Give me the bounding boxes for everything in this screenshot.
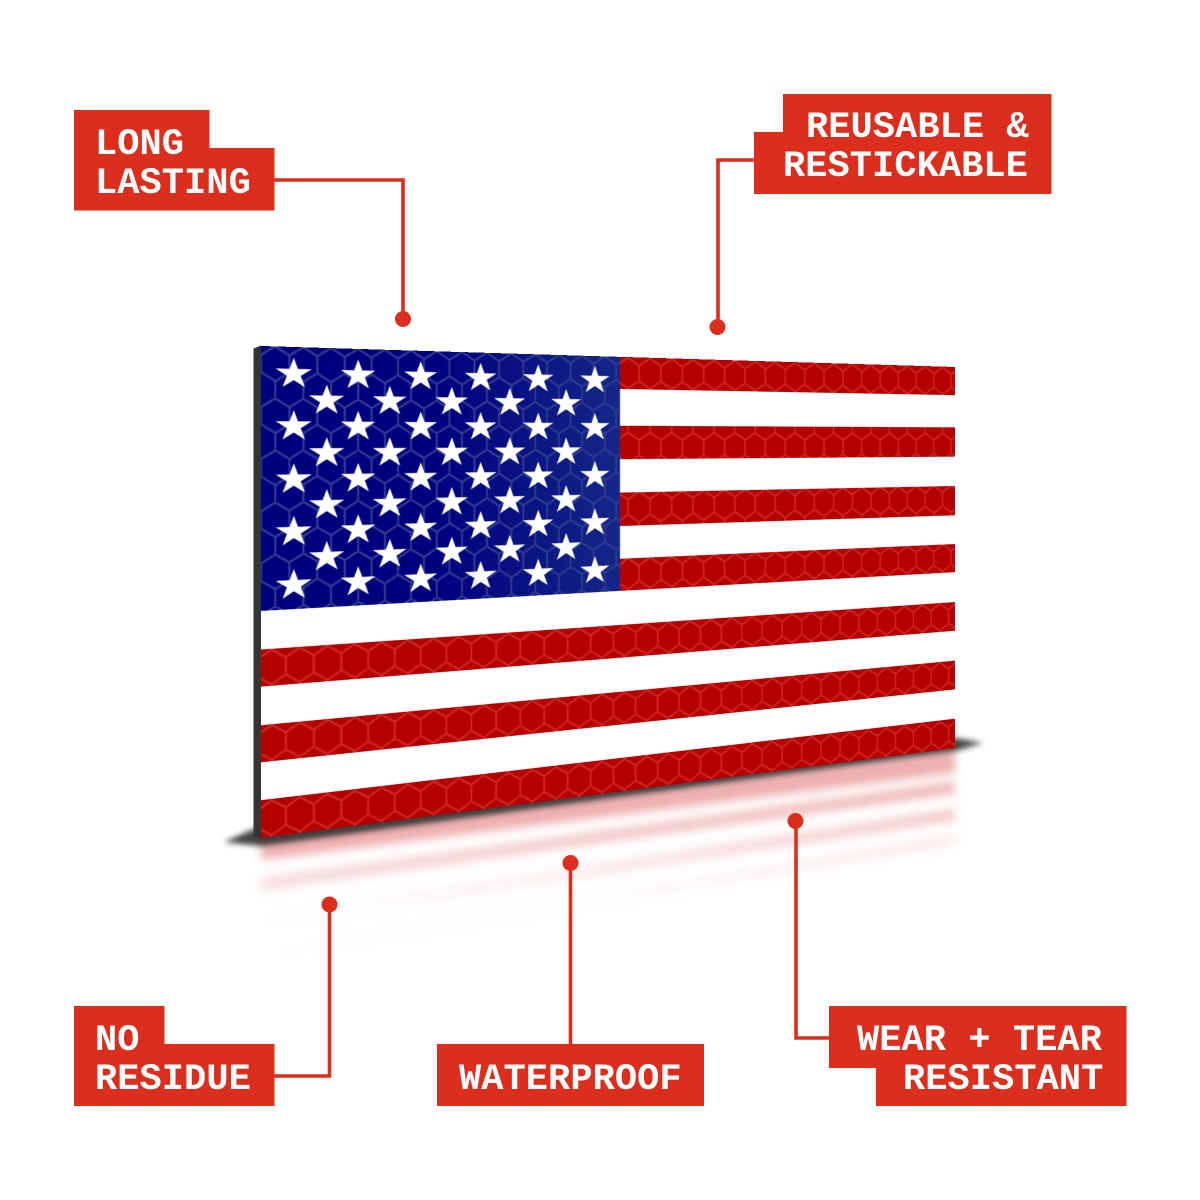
callout: wear and tear resistant: RESISTANT — [903, 1059, 1103, 1101]
callout: reusable and restickable: RESTICKABLE — [783, 146, 1028, 188]
callout: waterproof — [437, 855, 704, 1106]
callout: reusable and restickable — [710, 94, 1052, 335]
callout: long lasting: LONG — [95, 124, 184, 166]
callout: long lasting: LASTING — [95, 163, 251, 205]
callout: long lasting — [74, 110, 411, 327]
fifty white stars — [276, 357, 609, 599]
callout: waterproof: WATERPROOF — [459, 1059, 682, 1101]
callout: no residue: NO — [95, 1020, 140, 1062]
blue canton — [261, 346, 620, 611]
American flag with honeycomb reflective texture — [261, 346, 955, 838]
callout: wear and tear resistant — [788, 813, 1126, 1106]
red stripes — [261, 346, 955, 838]
callout: reusable and restickable: REUSABLE & — [806, 107, 1029, 149]
callout: no residue — [74, 896, 338, 1106]
callout: no residue: RESIDUE — [95, 1059, 251, 1101]
callout: wear and tear resistant: WEAR + TEAR — [857, 1020, 1103, 1062]
